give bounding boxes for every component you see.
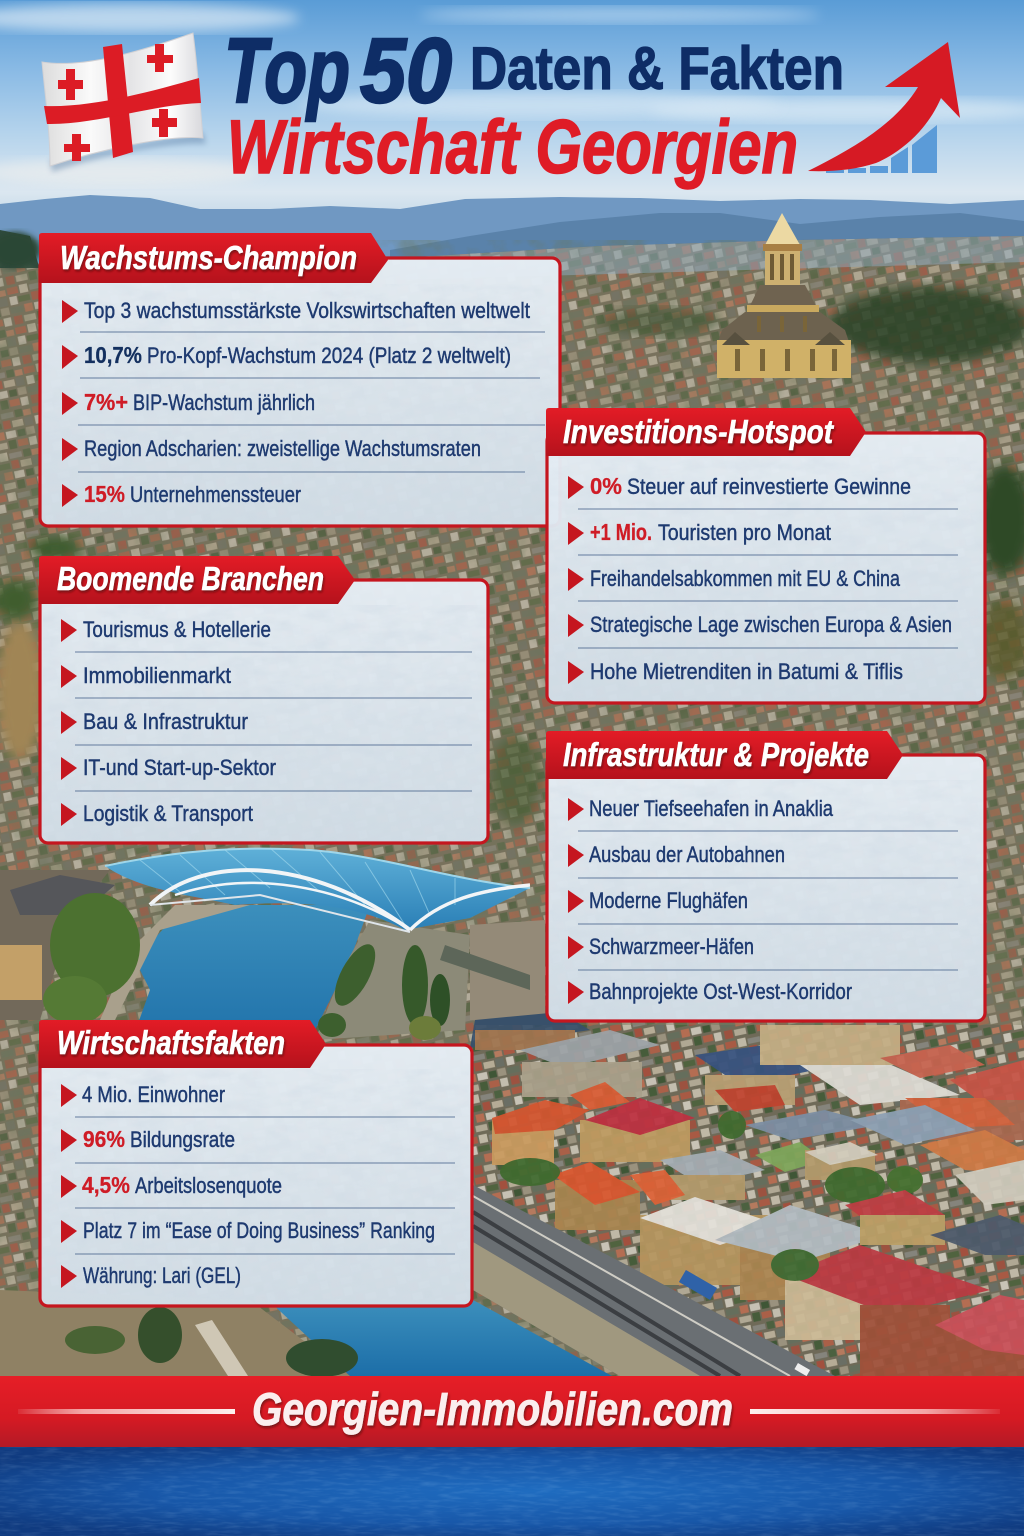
row: Logistik: Logistik & Transport (83, 801, 254, 826)
row: 96%: Bildungsrate (130, 1127, 235, 1152)
row: 10,7%: 10,7% (84, 342, 142, 368)
row: Top 3: Top 3 wachstumsstärkste Volkswirtschaften weltwelt (84, 298, 531, 323)
river lower (268, 1300, 612, 1377)
header: Boomende Branchen (39, 556, 355, 604)
row: Freihandel: Freihandelsabkommen mit EU & China (590, 566, 900, 591)
row: 15%: Unternehmenssteuer (130, 482, 301, 507)
background: green tree areas (0, 232, 1024, 825)
row: Bau: Bau & Infrastruktur (83, 709, 248, 734)
row: 10,7%: Pro-Kopf-Wachstum 2024 (Platz 2 weltwelt) (147, 343, 511, 368)
header: Infrastruktur & Projekte: Infrastruktur & Projekte (563, 736, 869, 773)
header: Wachstums-Champion (39, 233, 388, 283)
row: 10,7% (62, 342, 511, 369)
row: Einwohner: 4 Mio. Einwohner (82, 1082, 225, 1107)
row: Adscharien: Region Adscharien: zweistellige Wachstumsraten (84, 436, 481, 461)
row: Anaklia: Neuer Tiefseehafen in Anaklia (589, 796, 833, 821)
row: Immobilienmarkt: Immobilienmarkt (83, 663, 232, 688)
footer: banner: Georgien-Immobilien.com (252, 1383, 733, 1435)
header: Investitions-Hotspot: Investitions-Hotspot (563, 413, 835, 450)
title: Daten & Fakten: Daten & Fakten (470, 35, 844, 102)
footer: banner (0, 1376, 1024, 1447)
road and railway (473, 1185, 835, 1376)
row: 7%+ (62, 389, 315, 415)
row: 4,5% (61, 1172, 282, 1198)
header: Wachstums-Champion: Wachstums-Champion (60, 239, 357, 276)
footer: sea (0, 1447, 1024, 1536)
row: 15% (62, 481, 301, 507)
panel: Wirtschaftsfakten (39, 1020, 472, 1306)
row: 0%: 0% (590, 473, 622, 499)
row: 0%: Steuer auf reinvestierte Gewinne (627, 474, 911, 499)
header: Boomende Branchen: Boomende Branchen (57, 560, 324, 597)
icon: Georgian flag (42, 33, 206, 172)
row: Autobahnen: Ausbau der Autobahnen (589, 842, 785, 867)
row: 7%+: BIP-Wachstum jährlich (133, 390, 315, 415)
row: 7%+: 7%+ (84, 389, 128, 415)
background: mountains (0, 195, 1024, 280)
row: 4,5%: Arbeitslosenquote (135, 1173, 282, 1198)
row: +1 Mio. (568, 519, 832, 545)
row: +1 Mio.: +1 Mio. (590, 519, 652, 545)
title: Top 50: 50 (360, 20, 452, 122)
background: sky (0, 0, 1024, 240)
icon: growth arrow with bars (808, 42, 960, 173)
row: Platz 7: Platz 7 im “Ease of Doing Business” Ranking (83, 1218, 435, 1243)
row: Strategische Lage: Strategische Lage zwischen Europa & Asien (590, 612, 952, 637)
background: city texture (0, 236, 1024, 1376)
riverside park (0, 870, 545, 1040)
panel: Investitions-Hotspot (546, 408, 985, 703)
row: Währung (61, 1263, 241, 1288)
row: 96% (61, 1126, 235, 1152)
row: 15%: 15% (84, 481, 125, 507)
row: +1 Mio.: Touristen pro Monat (658, 520, 832, 545)
title: Wirtschaft Georgien: Wirtschaft Georgien (227, 105, 798, 190)
title block (224, 20, 844, 190)
row: Mietrenditen: Hohe Mietrenditen in Batumi & Tiflis (590, 659, 903, 684)
river upper (125, 905, 370, 1060)
row: 4,5%: 4,5% (82, 1172, 130, 1198)
header: Wirtschaftsfakten: Wirtschaftsfakten (57, 1024, 285, 1061)
background: rooftops lower right (470, 1012, 1024, 1376)
icon: Bridge of Peace (105, 848, 530, 932)
row: 96%: 96% (83, 1126, 125, 1152)
icon: Sameba cathedral (717, 213, 851, 378)
row: Bahnprojekte: Bahnprojekte Ost-West-Korridor (589, 979, 852, 1004)
row: Währung: Währung: Lari (GEL) (83, 1263, 241, 1288)
panel: Boomende Branchen (39, 556, 488, 843)
row: IT: IT-und Start-up-Sektor (83, 755, 276, 780)
row: Tourismus: Tourismus & Hotellerie (83, 617, 271, 642)
row: Schwarzmeer: Schwarzmeer-Häfen (589, 934, 754, 959)
cliff and bushes bottom left (0, 1290, 350, 1376)
panel: Infrastruktur & Projekte (546, 731, 985, 1021)
panel: Wachstums-Champion (39, 233, 560, 526)
title: Top 50: Top (224, 20, 350, 122)
row: Flughäfen: Moderne Flughäfen (589, 888, 748, 913)
header: Infrastruktur & Projekte (546, 731, 903, 779)
